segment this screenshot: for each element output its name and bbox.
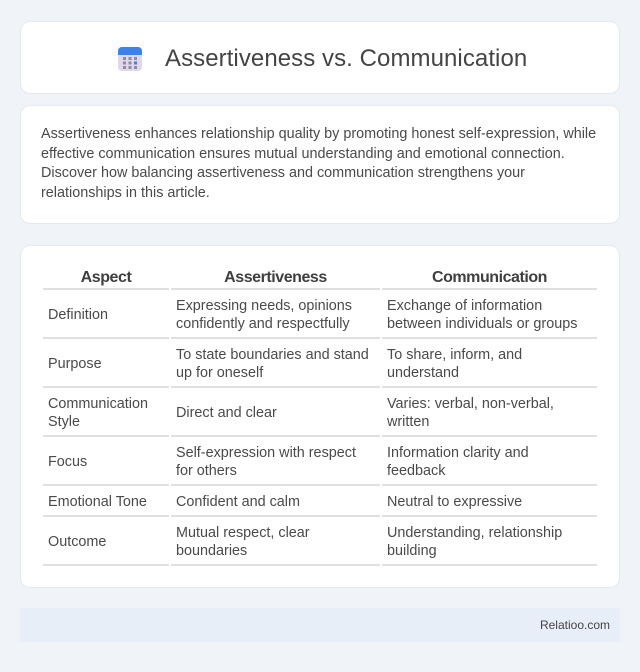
- row: focus: Focus: [48, 454, 87, 470]
- row: focus: Information clarity and: [387, 445, 529, 461]
- row: definition: between individuals or groups: [387, 316, 577, 332]
- row: communication style: Communication: [48, 396, 148, 412]
- row: outcome: Mutual respect, clear: [176, 525, 310, 541]
- row: outcome: Outcome: [48, 534, 106, 550]
- row: focus: [43, 445, 597, 486]
- row: emotional tone: Confident and calm: [176, 494, 300, 510]
- row: outcome: building: [387, 543, 437, 559]
- table card: [20, 245, 620, 588]
- row: focus: feedback: [387, 463, 445, 479]
- column headings: [43, 269, 597, 290]
- header card: [20, 21, 620, 94]
- footer text: Relatioo.com: [540, 618, 610, 632]
- row: purpose: Purpose: [48, 356, 102, 372]
- row: outcome: boundaries: [176, 543, 247, 559]
- intro text: [41, 126, 596, 200]
- row: communication style: Style: [48, 414, 80, 430]
- intro text: Discover how balancing assertiveness and communication strengthens your: [41, 165, 525, 181]
- row: communication style: Direct and clear: [176, 405, 277, 421]
- row: definition: Definition: [48, 307, 108, 323]
- column headings: Assertiveness: [224, 269, 327, 286]
- icon: calendar: [118, 47, 142, 71]
- comparison table: [43, 269, 597, 566]
- row: definition: confidently and respectfully: [176, 316, 350, 332]
- row: emotional tone: Emotional Tone: [48, 494, 147, 510]
- intro card: [20, 105, 620, 224]
- intro text: effective communication ensures mutual understanding and emotional connection.: [41, 146, 565, 162]
- row: purpose: To state boundaries and stand: [176, 347, 369, 363]
- row: purpose: To share, inform, and: [387, 347, 522, 363]
- row: outcome: Understanding, relationship: [387, 525, 562, 541]
- row: definition: Exchange of information: [387, 298, 542, 314]
- row: outcome: [43, 525, 597, 566]
- row: communication style: Varies: verbal, non-verbal,: [387, 396, 554, 412]
- footer bar: [20, 608, 620, 642]
- row: focus: for others: [176, 463, 237, 479]
- row: focus: Self-expression with respect: [176, 445, 356, 461]
- row: purpose: up for oneself: [176, 365, 263, 381]
- row: communication style: [43, 396, 597, 437]
- row: purpose: [43, 347, 597, 388]
- row: emotional tone: [43, 494, 597, 517]
- intro text: relationships in this article.: [41, 184, 210, 200]
- title: Assertiveness vs. Communication: [165, 45, 527, 72]
- column headings: Aspect: [81, 269, 131, 286]
- row: definition: Expressing needs, opinions: [176, 298, 352, 314]
- column headings: Communication: [432, 269, 547, 286]
- row: emotional tone: Neutral to expressive: [387, 494, 522, 510]
- intro text: Assertiveness enhances relationship quality by promoting honest self-expression, while: [41, 126, 596, 142]
- row: communication style: written: [387, 414, 429, 430]
- row: definition: [43, 298, 597, 339]
- row: purpose: understand: [387, 365, 459, 381]
